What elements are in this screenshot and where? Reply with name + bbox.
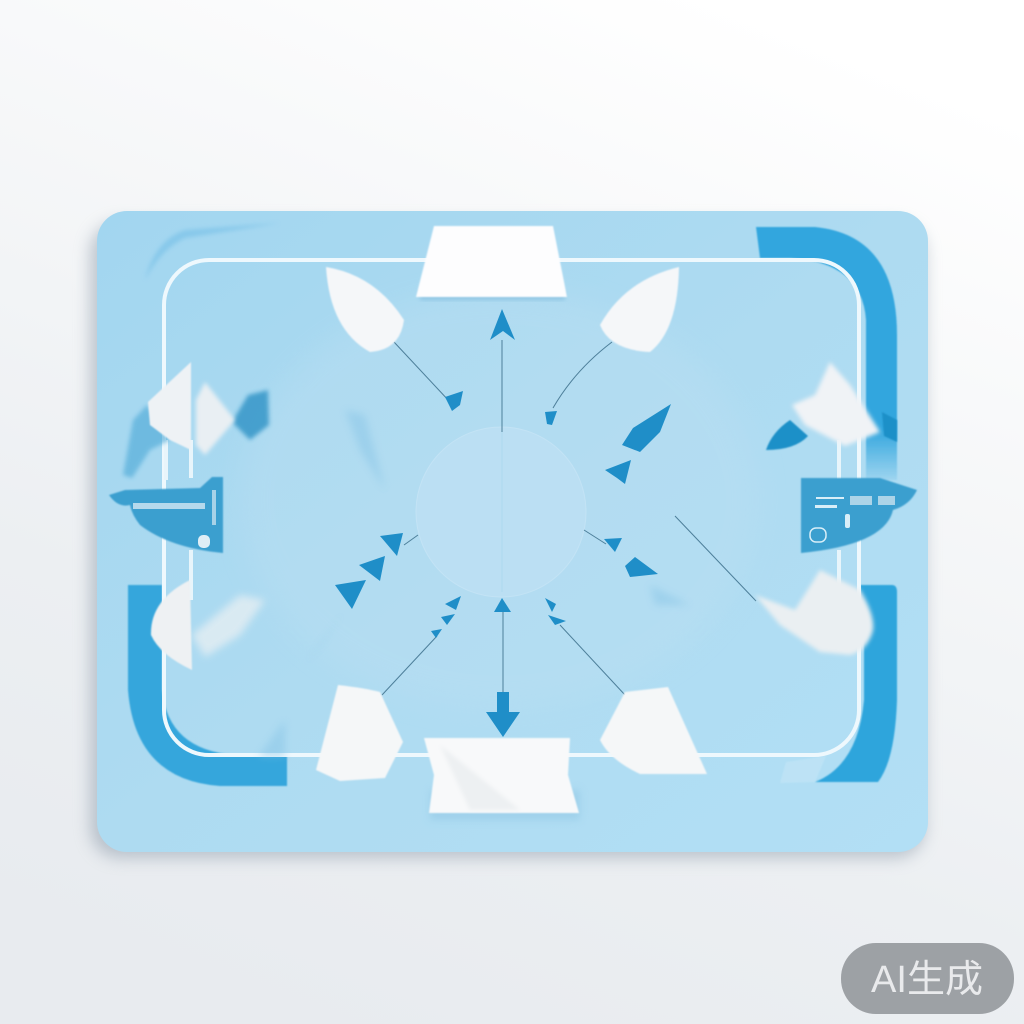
small arrow markers: [335, 391, 671, 638]
node: top left: [326, 267, 404, 352]
badge: AI generated: [841, 943, 1014, 1014]
soft background shapes: [258, 410, 690, 757]
white rounded frame: [164, 260, 859, 755]
frame segments: left: [166, 440, 191, 600]
bottom label tab: [424, 738, 579, 813]
side tab: right: [801, 478, 917, 553]
central circle: [416, 427, 586, 597]
corner accent: top right: [756, 227, 897, 480]
badge: AI generated: AI生成: [871, 959, 983, 1001]
corner accent: bottom left: [128, 585, 287, 786]
corner accent: bottom right: [815, 585, 897, 782]
arrow: bottom: [486, 692, 520, 737]
node: left upper: [123, 362, 269, 478]
frame segments: right: [837, 440, 841, 590]
corner accent: top left: [145, 223, 280, 280]
arrow: top: [490, 309, 515, 340]
top label tab: [416, 226, 567, 300]
node: bottom right: [600, 687, 707, 774]
node: right upper: [766, 362, 897, 450]
side tab: left: [109, 477, 223, 553]
node: bottom left: [316, 685, 403, 781]
node: top right: [600, 267, 679, 352]
corner highlight: bottom right: [780, 756, 826, 783]
node: right lower: [755, 570, 873, 655]
panel: main card: [90, 211, 928, 858]
connector lines: [382, 340, 756, 695]
node: left lower: [151, 580, 265, 670]
